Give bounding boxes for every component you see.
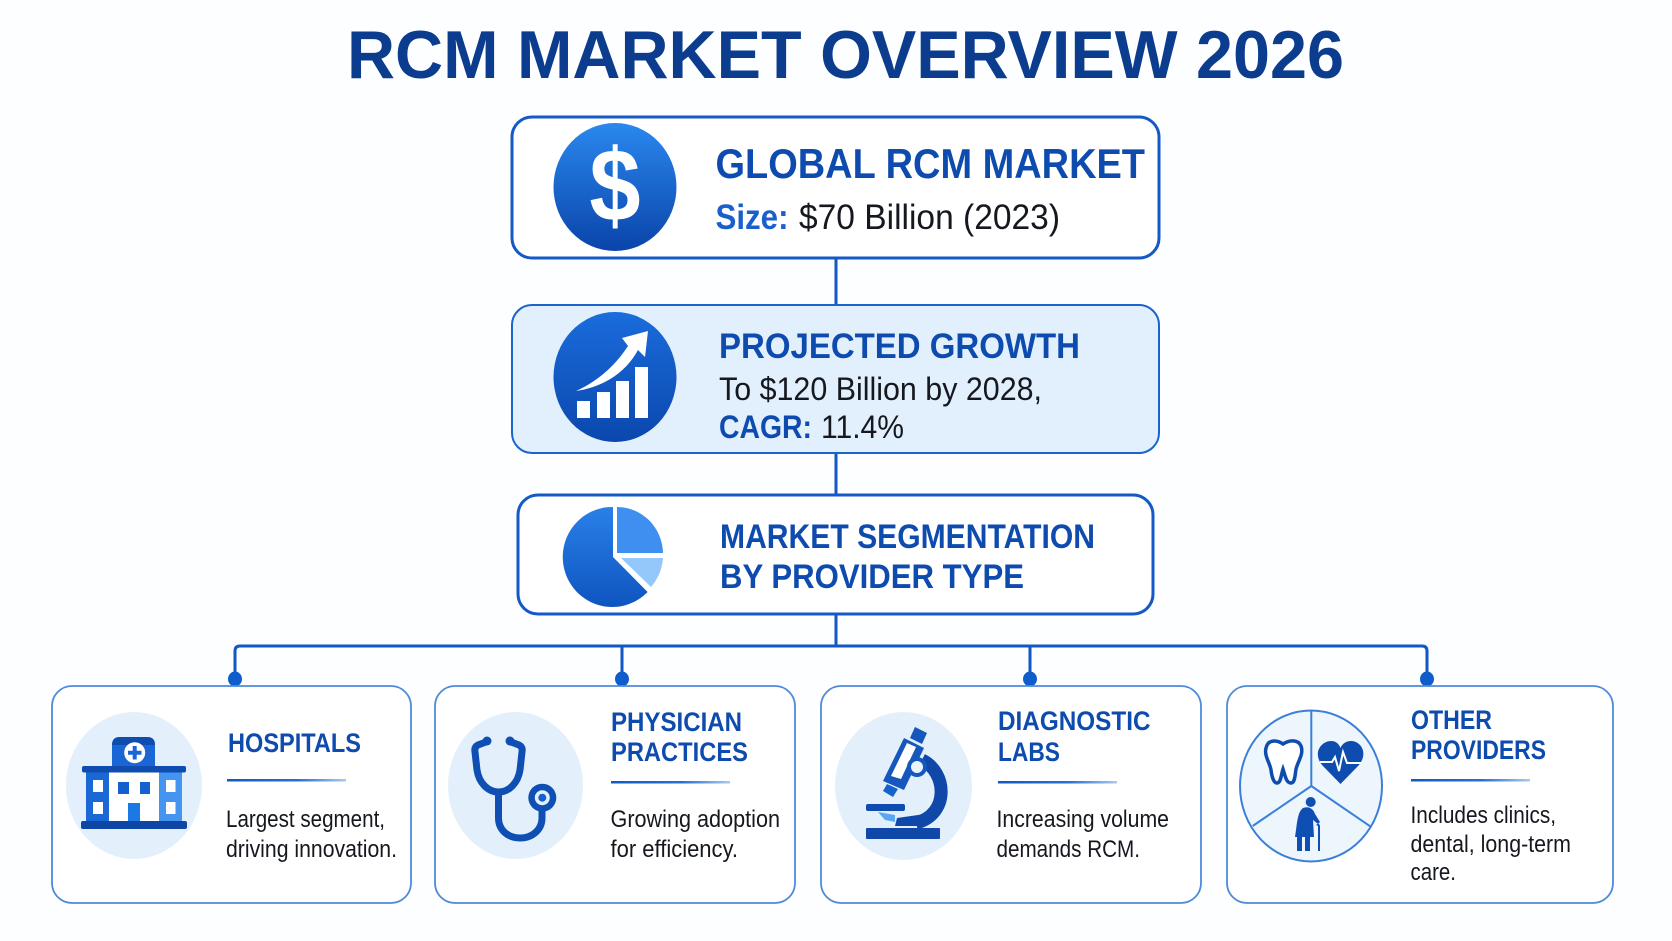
market size text: Size:: [716, 198, 788, 237]
panel: projected growth: [512, 305, 1159, 453]
description: hospitals: [226, 806, 397, 863]
description: other providers: Includes clinics,: [1410, 802, 1556, 829]
icon: dollar coin: [554, 123, 676, 251]
icon: elderly person with cane: [1295, 797, 1320, 851]
growth text: 11.4%: [821, 409, 904, 445]
description: diagnostic labs: [996, 806, 1169, 863]
panel: global RCM market: [512, 117, 1159, 258]
description: other providers: dental, long-term: [1410, 831, 1571, 858]
heading: market segmentation: [720, 518, 1095, 596]
heading: hospitals: HOSPITALS: [228, 728, 361, 758]
market size text: $70 Billion (2023): [799, 198, 1060, 237]
description: physician practices: for efficiency.: [610, 836, 738, 863]
icon: dollar coin: $: [589, 128, 641, 243]
heading: global RCM market: GLOBAL RCM MARKET: [716, 140, 1145, 187]
growth text: CAGR:: [719, 409, 812, 445]
description: other providers: care.: [1410, 859, 1456, 886]
icon: stethoscope: [448, 712, 583, 859]
heading: other providers: [1411, 705, 1546, 765]
heading: physician practices: PHYSICIAN: [611, 707, 742, 737]
icon: microscope: [835, 712, 972, 860]
description: physician practices: Growing adoption: [610, 806, 780, 833]
description: hospitals: driving innovation.: [226, 836, 397, 863]
heading: other providers: PROVIDERS: [1411, 735, 1546, 765]
heading: market segmentation: MARKET SEGMENTATION: [720, 518, 1095, 556]
heading: projected growth: PROJECTED GROWTH: [719, 327, 1080, 366]
heading: physician practices: PRACTICES: [611, 737, 748, 767]
heading: physician practices: [611, 707, 748, 767]
icon: growth chart: [554, 312, 676, 442]
heading: diagnostic labs: LABS: [998, 737, 1060, 767]
description: other providers: [1410, 802, 1571, 886]
icon: pie chart: [563, 507, 663, 607]
description: physician practices: [610, 806, 780, 863]
description: diagnostic labs: Increasing volume: [996, 806, 1169, 833]
heading: other providers: OTHER: [1411, 705, 1492, 735]
panel: market segmentation: [518, 495, 1153, 614]
heading: market segmentation: BY PROVIDER TYPE: [720, 558, 1024, 596]
card: physician practices: [435, 686, 795, 903]
card: other providers: [1227, 686, 1613, 903]
description: hospitals: Largest segment,: [226, 806, 385, 833]
heading: diagnostic labs: DIAGNOSTIC: [998, 706, 1150, 736]
connector lines: [228, 259, 1434, 686]
icon: tooth: [1266, 741, 1302, 783]
icon: segmented provider circle: [1240, 710, 1382, 862]
growth text: To $120 Billion by 2028,: [719, 371, 1042, 407]
growth text: [719, 371, 1042, 445]
icon: hospital: [66, 712, 202, 859]
card: hospitals: [52, 686, 411, 903]
card: diagnostic labs: [821, 686, 1201, 903]
description: diagnostic labs: demands RCM.: [996, 836, 1140, 863]
icon: heart with pulse: [1318, 741, 1363, 784]
title: RCM MARKET OVERVIEW 2026: [347, 17, 1344, 93]
heading: diagnostic labs: [998, 706, 1150, 767]
